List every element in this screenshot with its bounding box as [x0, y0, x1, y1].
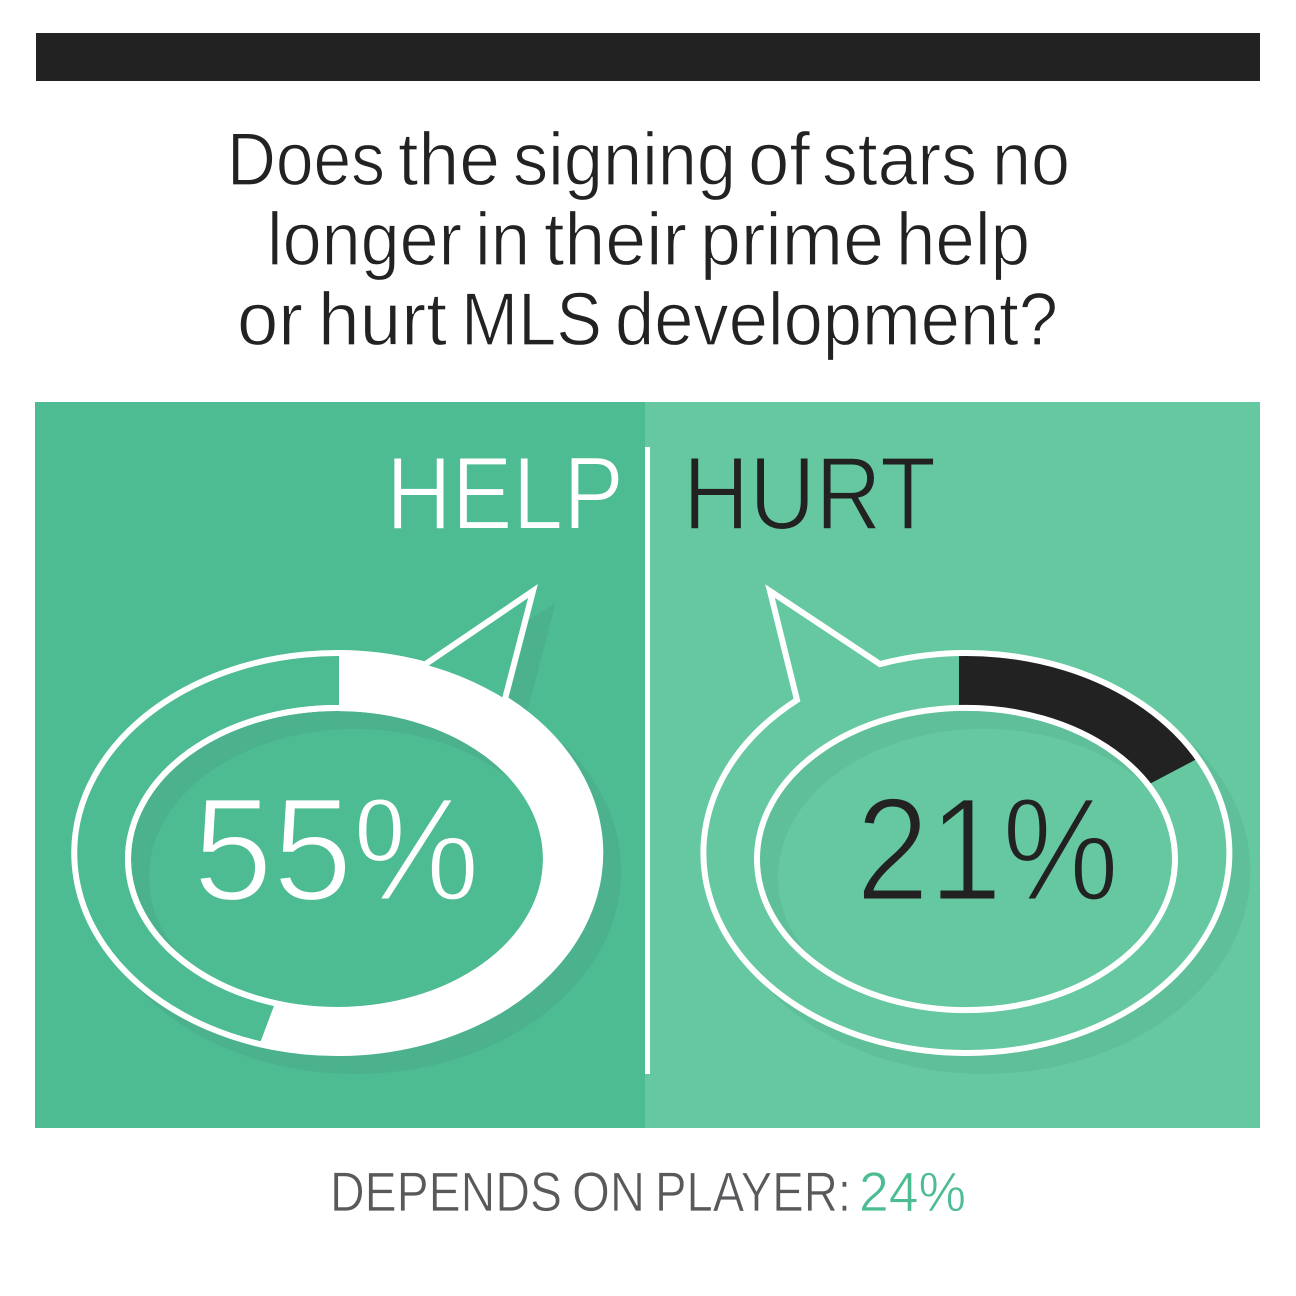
- footer note: ON: [572, 1160, 645, 1223]
- title: signing: [513, 117, 736, 201]
- title: MLS: [461, 277, 602, 361]
- footer note: DEPENDS: [330, 1160, 562, 1223]
- help speech bubble outline: [74, 591, 600, 1053]
- help heading: HELP: [386, 436, 624, 552]
- title: stars: [822, 117, 977, 201]
- hurt donut segment 21 percent: [959, 653, 1198, 785]
- center divider: [645, 447, 650, 1074]
- help donut segment 55 percent: [260, 653, 600, 1053]
- title: Does: [227, 117, 385, 201]
- title: longer: [267, 197, 462, 281]
- title: no: [992, 117, 1070, 201]
- panel: help: [35, 402, 645, 1128]
- hurt speech bubble outline: [703, 591, 1229, 1053]
- hurt percentage: 21%: [856, 768, 1119, 932]
- top black bar: [36, 33, 1260, 81]
- title: in: [475, 197, 530, 281]
- title: their: [544, 197, 687, 281]
- title: or: [237, 277, 303, 361]
- title: prime: [700, 197, 884, 281]
- title: of: [748, 117, 810, 201]
- title: hurt: [318, 277, 447, 361]
- footer note: 24%: [859, 1160, 966, 1223]
- help bubble shadow: [92, 609, 618, 1071]
- help inner ring: [128, 708, 546, 1010]
- panel: hurt: [645, 402, 1260, 1128]
- hurt heading: HURT: [683, 436, 936, 552]
- hurt bubble shadow: [721, 609, 1247, 1071]
- footer note: [330, 1160, 966, 1223]
- help percentage: 55%: [193, 768, 480, 932]
- title: development?: [615, 277, 1058, 361]
- title: [227, 117, 1070, 361]
- title: help: [896, 197, 1030, 281]
- footer note: PLAYER:: [655, 1160, 851, 1223]
- hurt bubble fill: [703, 591, 1229, 1053]
- title: the: [398, 117, 500, 201]
